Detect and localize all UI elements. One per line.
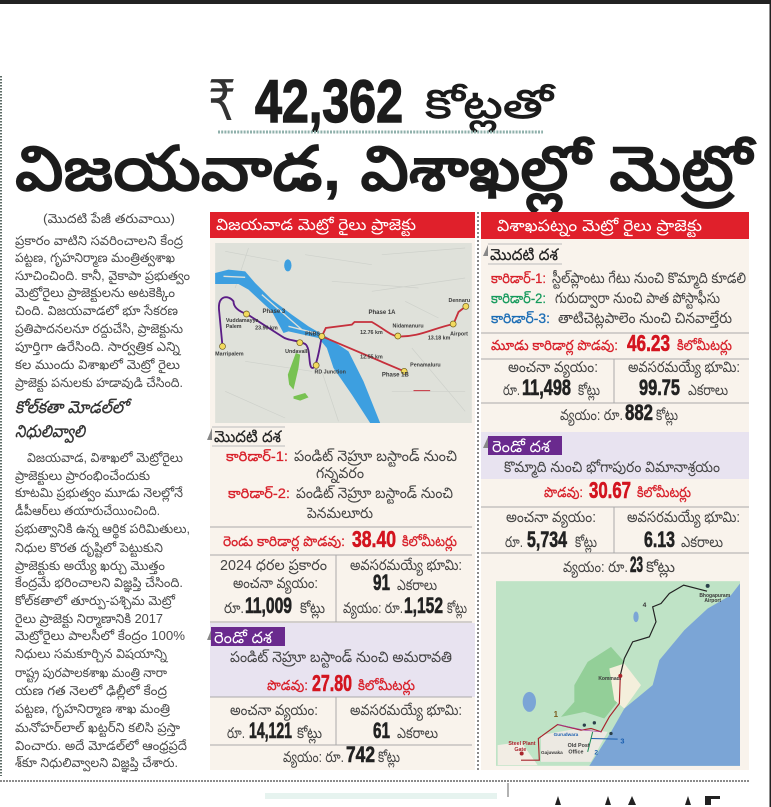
land: 91 acres [343, 557, 467, 619]
map: Vijayawada metro routes: Penamaluru [410, 362, 441, 368]
left column article text: ప్రభుత్వానికి ఉన్న ఆర్థిక పరిమితులు, [14, 521, 190, 540]
left column article text: మెట్రోరైలు పాలసీలో కేంద్రం 100% [15, 628, 185, 645]
length: 30.67 km: 30.67 [589, 477, 631, 503]
land: 6.13 acres: అవసరమయ్యే భూమి: [627, 509, 740, 528]
corridors: తాటిచెట్లపాలెం నుంచి చినవాల్తేరు [558, 310, 732, 329]
length: 46.23 km: 46.23 [627, 330, 670, 356]
phase 2 block: కొమ్మాది నుంచి భోగాపురం విమానాశ్రయం [504, 458, 720, 478]
length: 38.40 km: 38.40 [352, 526, 396, 552]
subheading: Kolkata model: కోల్‌కతా మోడల్‌లో [15, 398, 132, 417]
expense: 882 crore: 882 [625, 400, 653, 425]
length: 30.67 km: కిలోమీటర్లు [637, 484, 691, 503]
corridors: స్టీల్‌ప్లాంటు గేటు నుంచి కొమ్మాది కూడలి [552, 269, 746, 289]
map: Vijayawada metro routes [215, 243, 472, 423]
cost: 14,121 crore: కోట్లు [297, 725, 322, 744]
corridors: గురుద్వారా నుంచి పాత పోస్టాఫీసు [555, 289, 720, 309]
land: 91 acres: కోట్లు [447, 600, 467, 619]
cost: 5,734 crore: రూ. [505, 534, 523, 551]
heading: Vijayawada metro project: విజయవాడ మెట్రో రైలు ప్రాజెక్టు [216, 216, 416, 237]
cost: 14,121 crore: 14,121 [249, 718, 292, 743]
length: 38.40 km: రెండు కారిడార్ల పొడవు: [223, 533, 345, 552]
corridors: పండిట్ నెహ్రూ బస్టాండ్ నుంచి [294, 448, 457, 467]
map: Visakhapatnam metro routes: Bhogapuram [699, 593, 731, 599]
land: 61 acres: అవసరమయ్యే భూమి: [350, 702, 462, 721]
map: Vijayawada metro routes: Phase 1B [382, 372, 410, 378]
length: 30.67 km: పొడవు: [544, 484, 583, 500]
left column article text: పూర్తిగా ఉరేసింది. సార్వత్రిక ఎన్ని [15, 339, 182, 356]
land: 91 acres: 1,152 [404, 593, 443, 618]
cost: 14,121 crore: రూ. [227, 725, 245, 742]
left column article text: రాష్ట్ర పురపాలకశాఖ మంత్రి నారా [15, 665, 167, 683]
cost: 11,498 crore: 11,498 [522, 375, 571, 400]
map: Visakhapatnam metro routes [496, 581, 740, 766]
map: Visakhapatnam metro routes: Kommadi [598, 676, 622, 682]
panel: Visakhapatnam metro [481, 212, 749, 770]
title: main headline: విజయవాడ, విశాఖల్లో మెట్రో [15, 135, 757, 215]
length: 38.40 km [223, 526, 457, 552]
corridors: కారిడార్-3: [491, 310, 550, 326]
sea [589, 584, 740, 766]
coast urban [609, 664, 641, 708]
map: Vijayawada metro routes: Nidamanuru [392, 323, 424, 329]
cost: 11,498 crore: కోట్లు [578, 382, 600, 401]
map: Visakhapatnam metro routes: Gurudwara [554, 732, 579, 737]
tab: Phase 1: మొదటి దశ [490, 247, 559, 264]
corridors [226, 448, 457, 522]
cost: 11,009 crore: 2024 ధరల ప్రకారం [220, 557, 327, 575]
green park [288, 353, 308, 401]
expense: 882 crore: వ్యయం: రూ. [560, 407, 623, 426]
left column article text: మనోహర్‌లాల్ ఖట్టర్‌ని కలిసి ప్రస్తా [15, 720, 181, 738]
cost: 11,009 crore: అంచనా వ్యయం: [233, 575, 318, 594]
footer fragment: next article strip [265, 783, 720, 805]
map: Visakhapatnam metro routes: Gate [514, 747, 526, 753]
land: 6.13 acres: 6.13 [644, 527, 675, 552]
map: Visakhapatnam metro routes: 2 [594, 750, 598, 756]
left column article text: మెట్రోరైలు ప్రాజెక్టులను అటకెక్కిం [15, 285, 175, 303]
cost: 11,009 crore [220, 557, 327, 619]
title: amount line: కోట్లతో [425, 83, 557, 133]
heading: Vijayawada metro project [210, 212, 475, 238]
expense: 742 crore: కోట్లు [378, 749, 400, 768]
map: Vijayawada metro routes: Undavalli [285, 349, 309, 355]
left column article text: కోల్‌కతాలో తూర్పు-పశ్చిమ మెట్రో [15, 593, 176, 610]
left column article text: సూచించింది. కానీ, వైకాపా ప్రభుత్వం [15, 268, 190, 285]
map: Vijayawada metro routes: Dennaru [448, 298, 470, 304]
length: 46.23 km: కిలోమీటర్లు [677, 337, 732, 356]
land: 61 acres: 61 [373, 718, 390, 743]
corridors: గన్నవరం [316, 465, 364, 484]
corridors: కారిడార్-1: [491, 270, 546, 286]
phase 2 block: 27.80 [312, 670, 352, 696]
map: Vijayawada metro routes: Vuddamayya [226, 318, 259, 324]
expense: 23 crore [563, 552, 675, 578]
map: Visakhapatnam metro routes: 3 [620, 737, 624, 746]
left column article text: కూటమి ప్రభుత్వం మూడు నెలల్లోనే [15, 485, 183, 502]
left column article text: యణ గత నెలలో ఢిల్లీలో కేంద్ర [15, 683, 167, 700]
map: Visakhapatnam metro routes: 4 [643, 602, 647, 609]
land: 99.75 acres [628, 359, 740, 400]
left column article text: ప్రాజెక్టులు ప్రారంభించేందుకు [14, 468, 150, 486]
left column article text: పట్టణ, గృహనిర్మాణ శాఖ మంత్రి [15, 701, 170, 719]
map: Vijayawada metro routes: Phase 1A [369, 310, 396, 316]
left column article text [14, 211, 190, 773]
map: Vijayawada metro routes: Marripalem [215, 351, 244, 357]
cost: 11,498 crore: అంచనా వ్యయం: [508, 359, 598, 378]
panel: Vijayawada metro [207, 212, 475, 770]
expense: 742 crore: 742 [346, 742, 375, 767]
cost: 5,734 crore [505, 509, 597, 553]
land: 99.75 acres: ఎకరాలు [688, 382, 728, 399]
left column article text: శ్‌కూ నిధులివ్వాలని విజ్ఞప్తి చేశారు. [15, 755, 178, 773]
map: Visakhapatnam metro routes: Steel Plant [508, 741, 536, 747]
left column article text: ప్రతిపాదనలనూ రద్దుచేసి, ప్రాజెక్టును [14, 321, 183, 339]
phase 2 block: కిలోమీటర్లు [358, 677, 415, 696]
tab: Phase 2: రెండో దశ [492, 438, 551, 456]
cost: 11,498 crore [503, 359, 600, 401]
tab: Phase 2: రెండో దశ [214, 629, 273, 647]
land: 99.75 acres: అవసరమయ్యే భూమి: [628, 359, 740, 378]
expense: 882 crore [560, 400, 678, 426]
tab: Phase 2 [207, 627, 285, 647]
routes [620, 585, 707, 675]
left column article text: నిధుల కొరత దృష్టిలో పెట్టుకుని [15, 540, 163, 558]
cost: 11,009 crore: రూ. [224, 600, 244, 617]
river [215, 270, 380, 423]
left column article text: డీపీఆర్‌లు తయారుచేయించింది. [15, 503, 160, 518]
left column article text: ప్రాజెక్టుకు అయ్యే ఖర్చు మొత్తం [14, 558, 165, 576]
heading: Visakhapatnam metro project [481, 212, 749, 239]
corridors: పండిట్ నెహ్రూ బస్టాండ్ నుంచి [296, 485, 453, 504]
land: 99.75 acres: 99.75 [639, 375, 680, 400]
corridors: కారిడార్-1: [226, 448, 288, 464]
corridors: పెనమలూరు [306, 505, 373, 522]
land: 91 acres: ఎకరాలు [397, 577, 437, 594]
corridors [491, 269, 746, 329]
title: amount line [208, 68, 557, 135]
cost: 5,734 crore: అంచనా వ్యయం: [506, 509, 596, 528]
map: Vijayawada metro routes: Airport [450, 331, 468, 337]
cost: 14,121 crore [227, 702, 322, 744]
corridors: కారిడార్-2: [228, 485, 290, 501]
length: 30.67 km [544, 477, 691, 503]
map: Visakhapatnam metro routes: Airport [704, 598, 721, 604]
cost: 5,734 crore: 5,734 [527, 527, 568, 552]
cost: 5,734 crore: కోట్లు [575, 534, 597, 553]
land: 6.13 acres [627, 509, 740, 552]
expense: 882 crore: కోట్లు [656, 407, 678, 426]
title: amount line: ₹ [208, 69, 236, 132]
map: Visakhapatnam metro routes: Office [568, 750, 583, 756]
subheading: Kolkata model: నిధులివ్వాలి [15, 422, 86, 443]
cost: 14,121 crore: అంచనా వ్యయం: [230, 702, 318, 721]
corridors: కారిడార్-2: [491, 290, 546, 306]
map: Vijayawada metro routes: 12.55 km [360, 355, 383, 361]
left column article text: కేంద్రమే భరించాలని విజ్ఞప్తి చేసింది. [15, 575, 183, 593]
land: 91 acres: అవసరమయ్యే భూమి: [350, 557, 462, 576]
phase 2 block [481, 432, 749, 479]
left column article text: ప్రకారం వాటిని సవరించాలని కేంద్ర [14, 233, 183, 249]
land: 91 acres: 91 [373, 570, 390, 595]
map: Visakhapatnam metro routes: Old Post [568, 743, 590, 749]
map: Vijayawada metro routes: Palem [226, 324, 242, 330]
map: Vijayawada metro routes: RD Junction [314, 370, 346, 376]
expense: 742 crore [283, 742, 400, 768]
map: Visakhapatnam metro routes: 1 [554, 710, 559, 719]
map: Vijayawada metro routes: 12.76 km [360, 330, 383, 336]
map: Vijayawada metro routes: PNBS [305, 332, 320, 338]
phase 2 block: పండిట్ నెహ్రూ బస్టాండ్ నుంచి అమరావతి [230, 649, 452, 668]
left column article text: పట్టణ, గృహనిర్మాణ మంత్రిత్వశాఖ [15, 250, 175, 268]
map: Vijayawada metro routes: 13.18 km [428, 335, 451, 341]
length: 46.23 km: మూడు కారిడార్ల పొడవు: [491, 337, 618, 356]
left column article text: ప్రాజెక్టు పనులకు హడావుడి చేసింది. [14, 375, 183, 393]
left column article text: విజయవాడ, విశాఖలో మెట్రోరైలు [27, 450, 183, 467]
land: 61 acres [350, 702, 462, 743]
left column article text: కల ముందు విశాఖలో మెట్రో రైలు [15, 357, 181, 374]
subheading: Kolkata model [15, 398, 132, 443]
land: 6.13 acres: ఎకరాలు [681, 534, 723, 551]
left column article text: వించారు. అదే మోడల్‌లో ఆంధ్రప్రదే [15, 738, 187, 754]
phase 2 block [207, 623, 475, 697]
left column article text: నిధులు సమకూర్చిన విషయాన్ని [15, 646, 168, 663]
tab: Phase 1: మొదటి దశ [214, 429, 282, 446]
forest [561, 647, 624, 718]
expense: 23 crore: కోట్లు [646, 559, 675, 578]
map: Vijayawada metro routes: 23.90 km [255, 326, 278, 332]
length: 46.23 km [491, 330, 732, 356]
land: 61 acres: ఎకరాలు [397, 725, 438, 742]
cost: 11,498 crore: రూ. [503, 382, 520, 399]
left column article text: (మొదటి పేజీ తరువాయి) [43, 211, 175, 226]
cost: 11,009 crore: కోట్లు [300, 600, 325, 619]
length: 38.40 km: కిలోమీటర్లు [402, 533, 457, 552]
cost: 11,009 crore: 11,009 [245, 593, 292, 618]
expense: 23 crore: 23 [630, 552, 643, 577]
map: Vijayawada metro routes: Phase 3 [262, 309, 286, 315]
expense: 742 crore: వ్యయం: రూ. [283, 749, 344, 768]
expense: 23 crore: వ్యయం: రూ. [563, 559, 628, 578]
land: 91 acres: వ్యయం: రూ. [343, 600, 403, 619]
metro lines [219, 297, 322, 368]
map: Visakhapatnam metro routes: Gajuwaka [541, 750, 563, 755]
phase 2 block: పొడవు: [267, 677, 308, 693]
heading: Visakhapatnam metro project: విశాఖపట్నం మెట్రో రైలు ప్రాజెక్టు [497, 217, 702, 238]
left column article text: చింది. విజయవాడలో భూ సేకరణ [15, 303, 178, 318]
title: amount line: 42,362 [255, 68, 403, 135]
left column article text: రైలు ప్రాజెక్టు నిర్మాణానికి 2017 [15, 611, 163, 629]
tab: Phase 2 [483, 436, 562, 456]
